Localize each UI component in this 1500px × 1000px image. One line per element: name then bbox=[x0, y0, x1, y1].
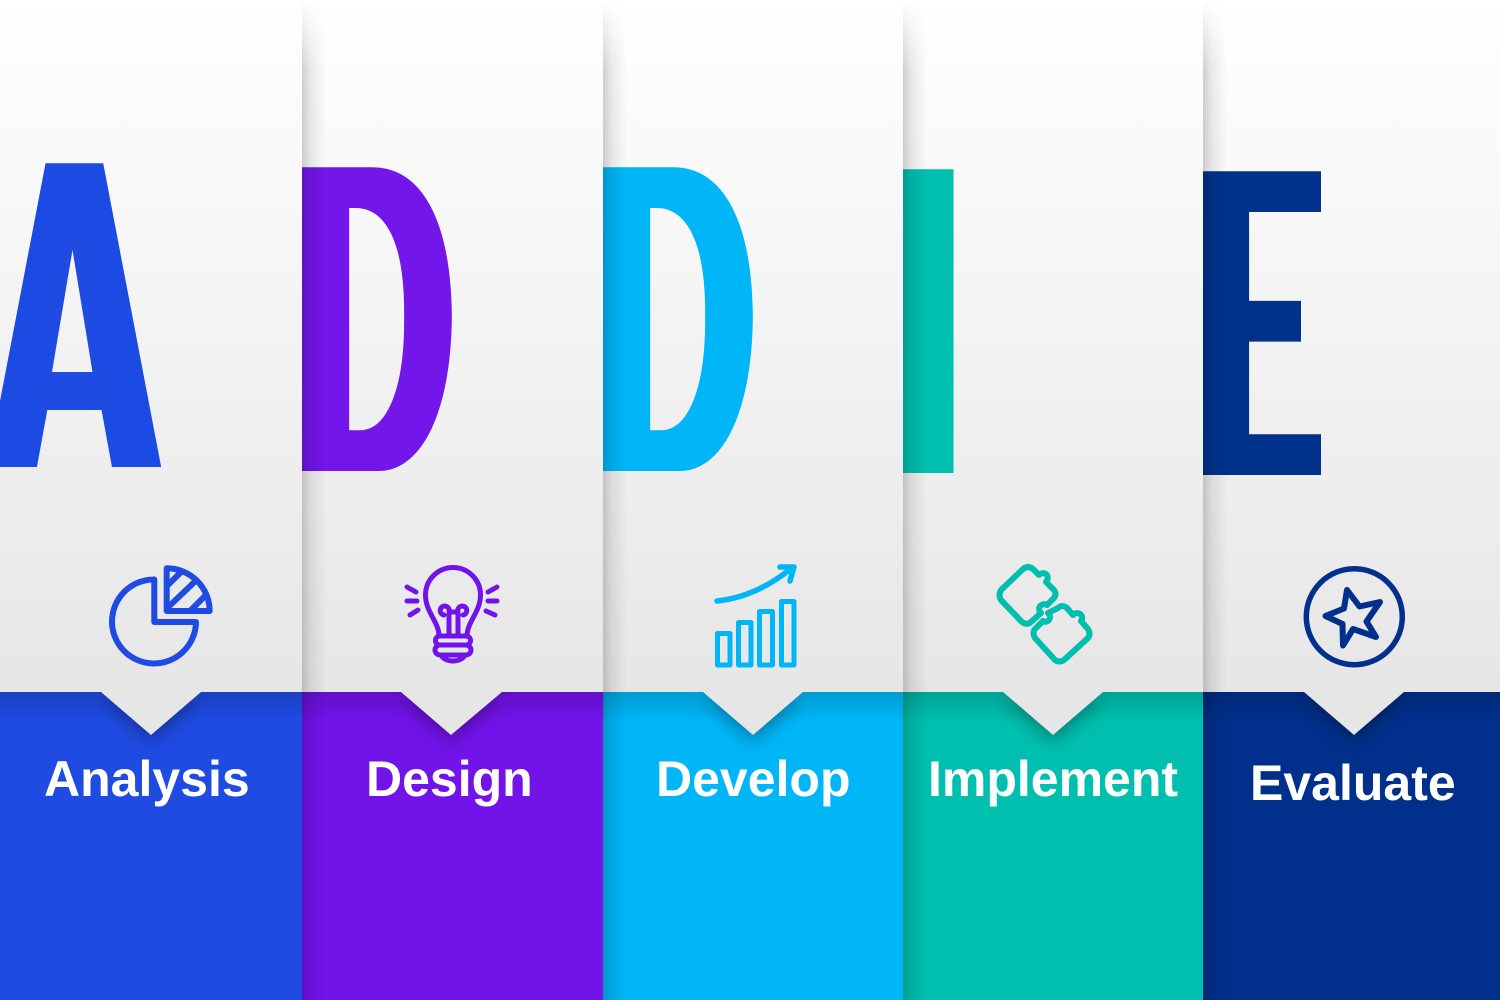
label: Evaluate: Evaluate bbox=[1250, 755, 1456, 811]
icon: puzzle pieces bbox=[1000, 567, 1090, 662]
icon: star badge bbox=[1306, 569, 1402, 665]
icon: light bulb bbox=[407, 567, 497, 661]
colored band: Design bbox=[302, 692, 603, 1000]
big letter I: I bbox=[895, 66, 961, 576]
panel edge shadows bbox=[302, 0, 1227, 1000]
big letter D: D bbox=[295, 63, 453, 573]
colored band: Analysis bbox=[0, 692, 302, 1000]
big letter D: D bbox=[596, 63, 754, 573]
background panels bbox=[0, 0, 1500, 695]
colored band: Implement bbox=[903, 692, 1203, 1000]
label: Analysis: Analysis bbox=[44, 751, 250, 807]
label: Develop: Develop bbox=[656, 751, 851, 807]
colored band: Develop bbox=[603, 692, 903, 1000]
big letter E: E bbox=[1201, 68, 1322, 577]
icon: pie chart bbox=[112, 567, 216, 663]
icon: growth chart bbox=[717, 567, 794, 665]
label: Design: Design bbox=[366, 751, 533, 807]
big letter E bbox=[1203, 171, 1321, 475]
colored band: Evaluate bbox=[1203, 692, 1500, 1000]
big letter A bbox=[0, 163, 162, 467]
label: Implement: Implement bbox=[928, 751, 1178, 807]
